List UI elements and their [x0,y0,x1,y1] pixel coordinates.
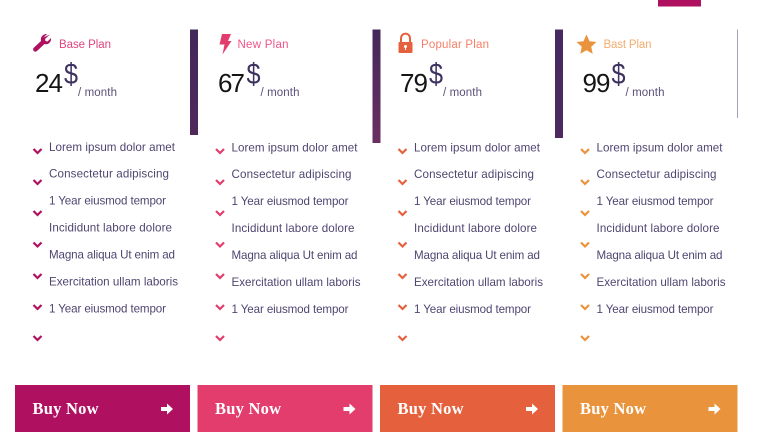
divider bar [555,30,563,138]
panel: new plan [198,30,380,432]
price: 24: $ [64,58,78,91]
check marks [581,149,589,340]
price: 79 [400,58,482,99]
feature list: 1 Year eiusmod tempor [414,303,531,316]
feature list [596,142,726,316]
feature list: Exercitation ullam laboris [232,276,361,289]
divider line [737,30,738,118]
price: 24: / month [78,87,117,99]
price: 99: 99 [582,68,610,98]
button: buy now: Buy Now [32,399,99,418]
feature list: Lorem ipsum dolor amet [232,142,358,154]
feature list: Lorem ipsum dolor amet [596,142,723,154]
top accent tab [658,0,701,6]
price: 79: 79 [400,68,428,98]
feature list: 1 Year eiusmod tempor [49,302,166,316]
price: 99 [582,58,664,99]
feature list: Incididunt labore dolore [414,222,537,235]
feature list: 1 Year eiusmod tempor [596,303,714,316]
feature list: Magna aliqua Ut enim ad [596,249,722,262]
check marks [34,149,42,340]
divider bar [190,30,198,135]
panel: popular plan [380,30,563,432]
button: buy now: Buy Now [580,399,646,418]
button: buy now: Buy Now [398,399,464,418]
icon: lightning bolt [220,34,232,54]
panel: base plan [15,30,198,432]
price: 79: / month [443,87,482,99]
button: buy now [380,385,555,432]
button: buy now [562,385,738,432]
heading: popular plan: Popular Plan [421,39,489,51]
feature list: Magna aliqua Ut enim ad [49,248,175,262]
button: buy now: Buy Now [215,399,281,418]
heading: bast plan: Bast Plan [604,39,652,51]
icon: star [576,34,596,54]
feature list: Incididunt labore dolore [49,222,172,234]
feature list: Consectetur adipiscing [232,168,352,181]
panel: best plan [562,30,738,432]
button: buy now [15,385,190,432]
feature list: 1 Year eiusmod tempor [596,195,714,208]
check marks [216,149,224,340]
check marks [398,149,406,340]
price: 24 [35,58,117,99]
feature list: 1 Year eiusmod tempor [414,195,531,208]
feature list: Magna aliqua Ut enim ad [232,249,358,262]
feature list: Exercitation ullam laboris [596,276,726,289]
feature list: Exercitation ullam laboris [49,276,178,288]
feature list: 1 Year eiusmod tempor [49,194,166,208]
feature list: Exercitation ullam laboris [414,276,543,289]
button: buy now [198,385,372,432]
feature list [232,142,361,316]
feature list: Consectetur adipiscing [596,168,716,181]
price: 67: / month [260,87,300,99]
feature list: Lorem ipsum dolor amet [49,141,176,154]
feature list: Consectetur adipiscing [49,168,169,180]
price: 67 [218,58,300,99]
feature list: 1 Year eiusmod tempor [232,195,349,208]
feature list [414,142,543,316]
feature list: Magna aliqua Ut enim ad [414,249,540,262]
feature list: Incididunt labore dolore [232,222,354,235]
feature list: Incididunt labore dolore [596,222,720,235]
price: 99: / month [626,87,664,99]
icon: padlock [398,34,412,53]
feature list: Consectetur adipiscing [414,168,534,181]
price: 67: $ [246,58,261,91]
heading: new plan: New Plan [238,39,288,51]
divider bar [372,30,380,143]
icon: wrench [33,34,51,52]
heading: base plan: Base Plan [59,39,111,51]
price: 79: $ [429,58,443,91]
price: 67: 67 [218,68,245,98]
price: 99: $ [612,58,626,91]
feature list [49,141,178,316]
feature list: 1 Year eiusmod tempor [232,303,349,316]
price: 24: 24 [35,68,63,98]
feature list: Lorem ipsum dolor amet [414,142,541,154]
